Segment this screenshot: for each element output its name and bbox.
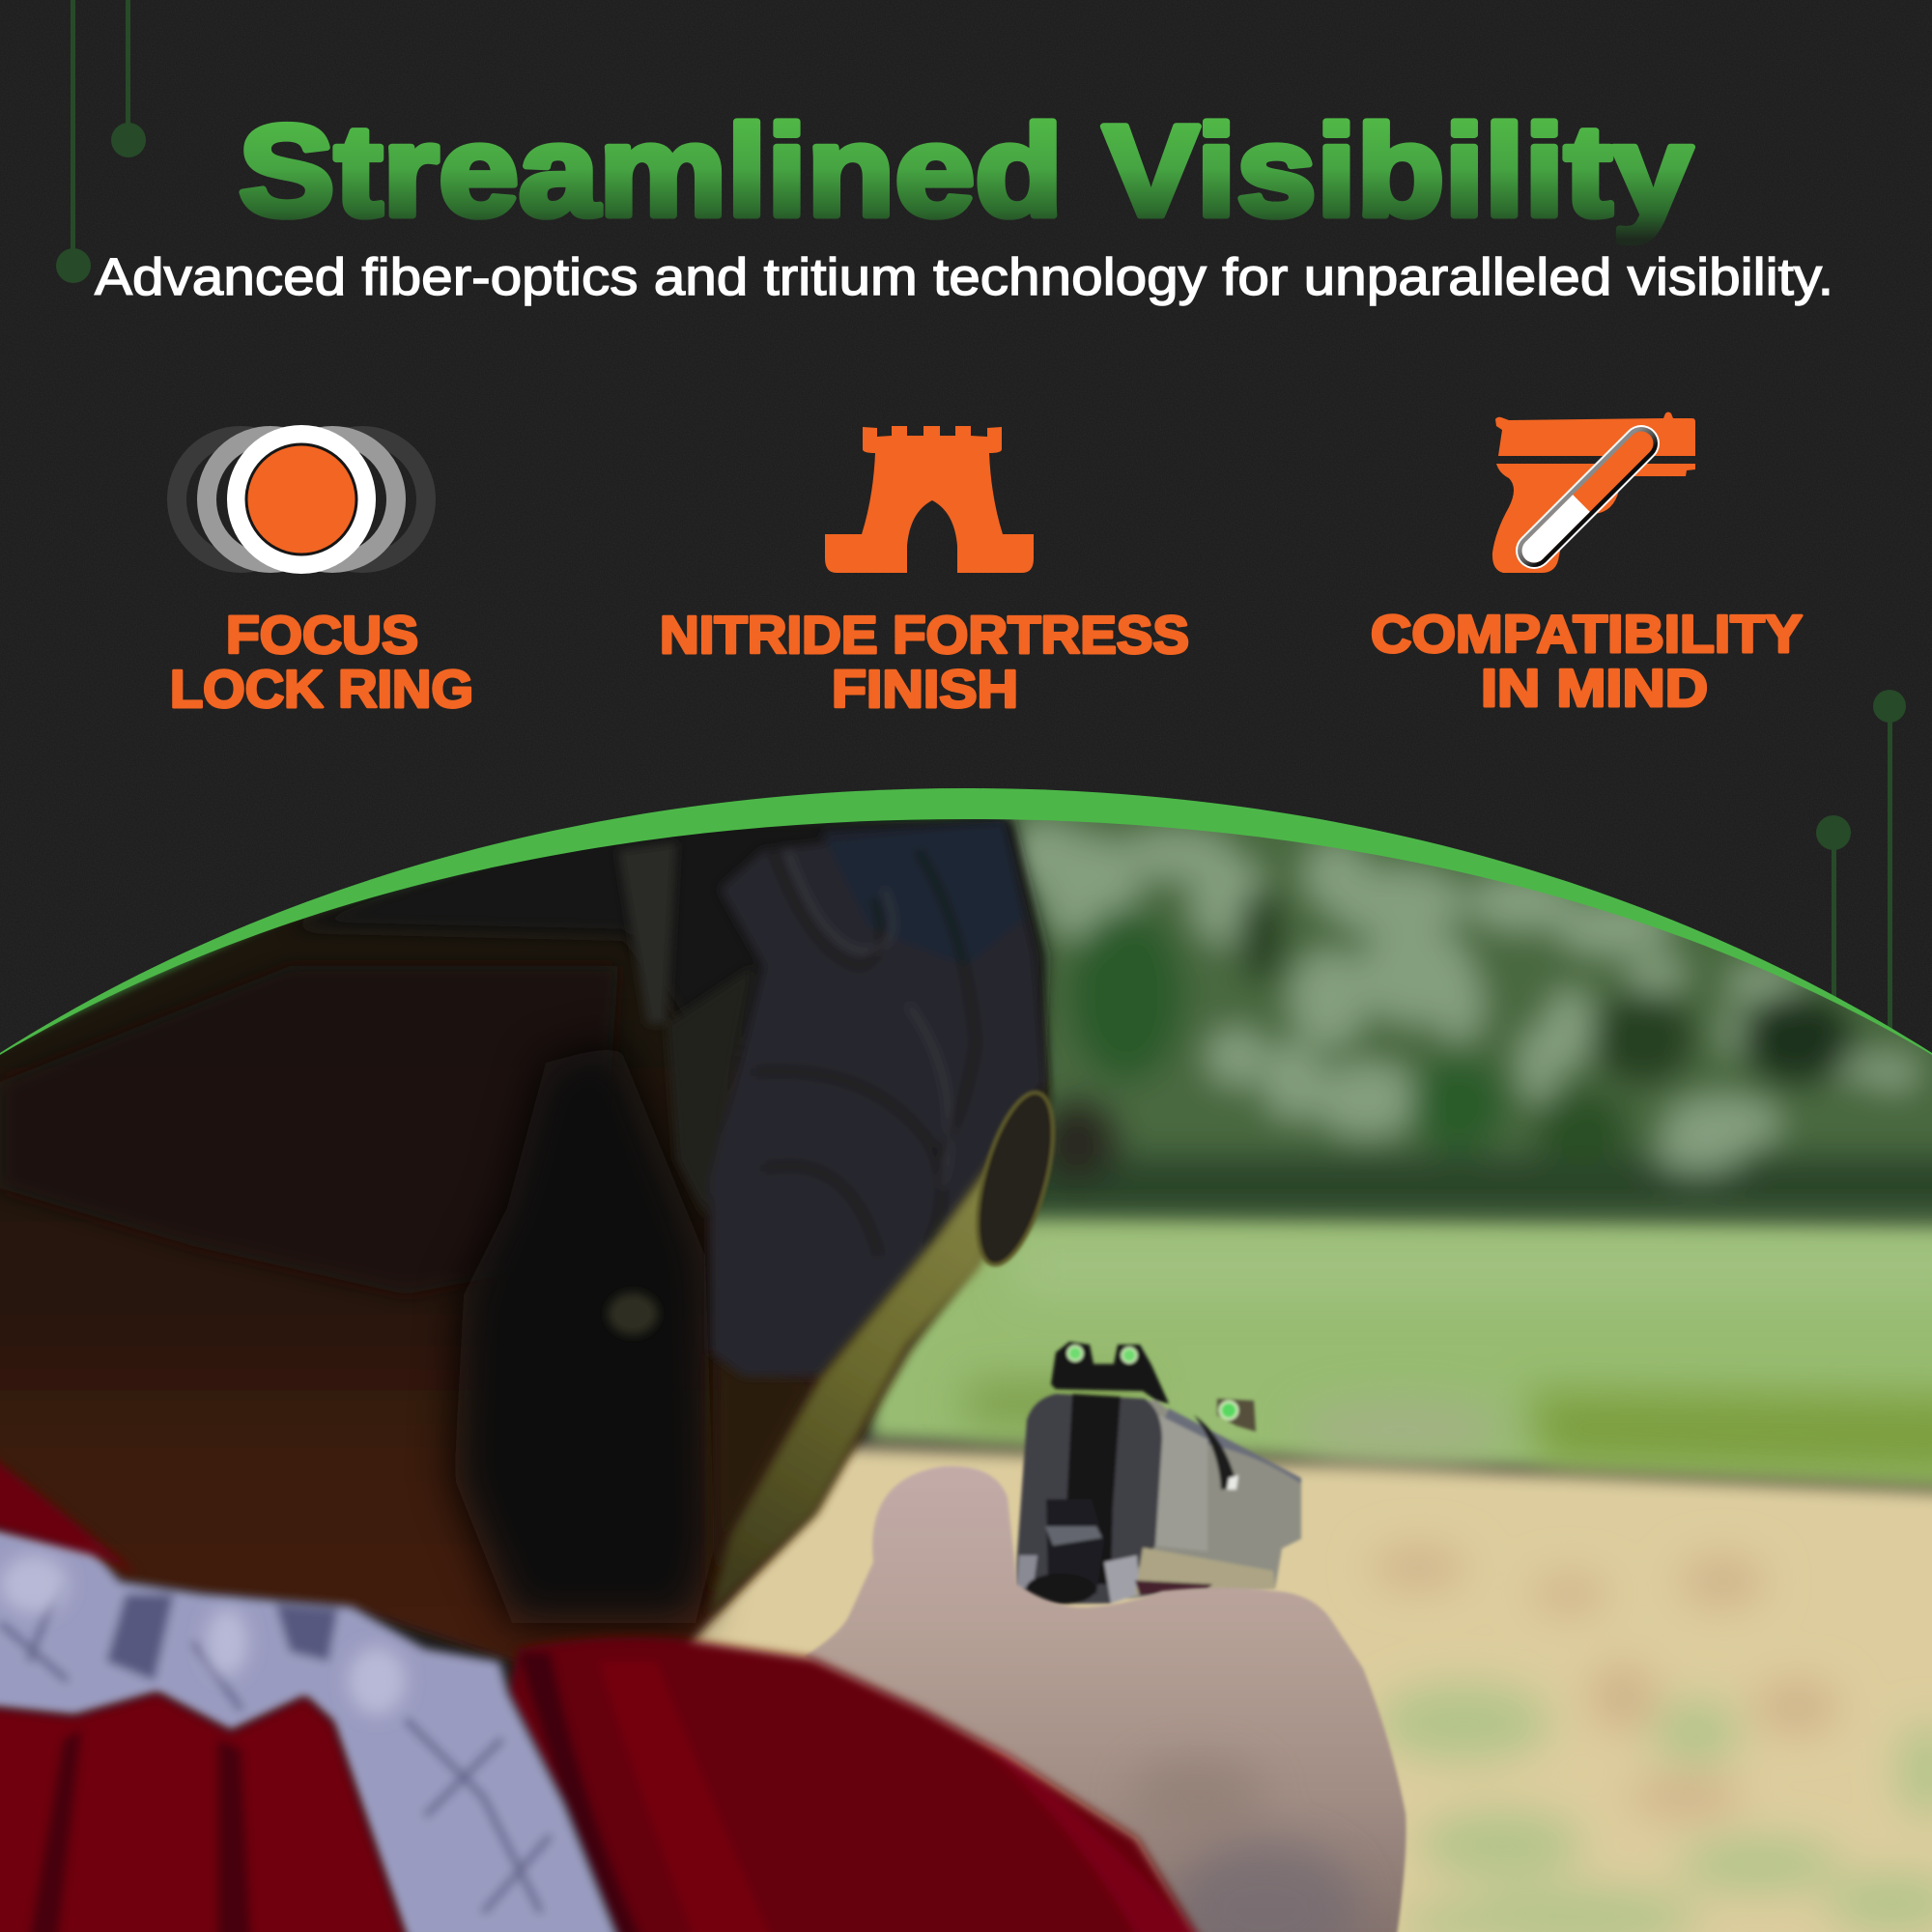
label: nitride fortress finish: NITRIDE FORTRESS (660, 605, 1189, 665)
photo: lower jaw (711, 1361, 806, 1565)
photo: head and neck (0, 821, 1049, 1662)
photo: shadow behind ear (454, 1043, 715, 1623)
photo: glasses edge (975, 1089, 1057, 1269)
photo: grass band (869, 1219, 1932, 1488)
green arc (0, 788, 1932, 1159)
photo: striped collar (0, 1524, 619, 1932)
label: nitride fortress finish (660, 605, 1189, 719)
label: focus lock ring: FOCUS (226, 605, 418, 665)
photo: pistol (1014, 1342, 1301, 1605)
photo: hand gripping pistol (804, 1466, 1406, 1932)
subtitle: Advanced fiber-optics and tritium technology for unparalleled visibility. (95, 248, 1833, 306)
decorative circuit lines top left (56, 0, 146, 283)
label: focus lock ring: LOCK RING (170, 659, 473, 719)
decorative circuit lines right (1816, 690, 1906, 1043)
photo: tree line (968, 819, 1932, 1233)
photo: collar highlights (0, 1555, 406, 1715)
label: compatibility in mind (1371, 604, 1803, 718)
photo: dry field (676, 1439, 1932, 1932)
panel: photo of shooter aiming pistol (0, 773, 1932, 1932)
label: compatibility in mind: COMPATIBILITY (1371, 604, 1803, 664)
icon: focus lock ring (177, 435, 426, 564)
photo: lit cheek (709, 1162, 985, 1613)
label: compatibility in mind: IN MIND (1481, 658, 1708, 718)
label: nitride fortress finish: FINISH (832, 659, 1018, 719)
icon: fortress tower (825, 426, 1034, 573)
photo: dry field mottling (1371, 1547, 1932, 1932)
photo: arm hair shading (1130, 1758, 1357, 1932)
photo: earmuff (608, 821, 1045, 1377)
title: Streamlined Visibility (239, 99, 1692, 243)
panel: dark textured header background (0, 0, 1932, 1063)
photo: red shirt left (0, 1449, 407, 1932)
photo: red shirt shoulder (508, 1637, 1202, 1932)
photo: grass tonal patches (966, 1236, 1932, 1478)
icon: pistol with fiber-optic tube (1492, 412, 1695, 573)
label: focus lock ring (170, 605, 473, 719)
photo: hair shading and dark cap (0, 816, 1045, 1294)
